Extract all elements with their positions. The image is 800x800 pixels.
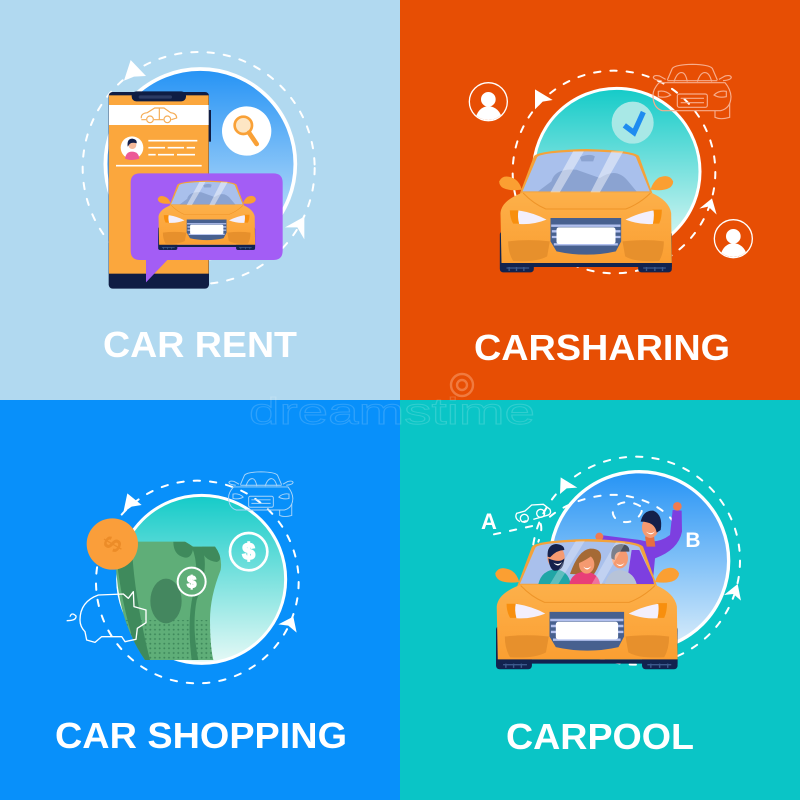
arrowhead top: [123, 493, 142, 512]
dollar ring large: [230, 533, 267, 570]
piggy bank outline: [67, 592, 146, 642]
gradient circle: [533, 88, 700, 255]
dollar ring small: $: [187, 573, 197, 592]
car front: [499, 149, 673, 272]
arrowhead bottom: [285, 217, 304, 239]
illustration: shared car: [469, 64, 752, 273]
coin: [87, 518, 138, 570]
car outline: [653, 64, 731, 119]
car front: [158, 181, 256, 250]
gradient circle: [118, 495, 286, 663]
dashed circular arrow path: [83, 52, 315, 284]
watermark wordmark: dreamstime: [249, 391, 535, 432]
dollar ring small: [178, 568, 206, 596]
avatar: [121, 136, 143, 160]
illustration: money: [67, 472, 299, 683]
letter A: A: [481, 509, 497, 534]
car front: [495, 539, 679, 669]
speech bubble: [131, 173, 283, 282]
dashed route from A to B: [494, 495, 673, 542]
dashed circular arrow path: [96, 481, 299, 683]
gradient circle: [105, 69, 295, 259]
panel: carsharing: [400, 0, 800, 400]
panel: car shopping: [0, 400, 400, 800]
car line icon: [141, 108, 177, 120]
panel background: [0, 0, 400, 400]
smiling man: [605, 544, 637, 584]
panel background: [400, 0, 800, 400]
coin: $: [98, 532, 129, 557]
panel: carpool: [400, 400, 800, 800]
magnifier icon: [222, 106, 271, 156]
purple torso inside car: [627, 550, 654, 584]
watermark spiral: [451, 374, 473, 396]
panel background: [400, 400, 800, 800]
smartphone: [109, 91, 211, 289]
illustration: phone and car rental: [83, 52, 315, 289]
letter B: B: [685, 529, 701, 552]
waving passenger: [595, 502, 682, 583]
user icon left: [469, 83, 507, 122]
dashed circular arrow path: [532, 457, 740, 665]
dollar ring large: $: [242, 539, 255, 565]
user icon right: [714, 220, 752, 259]
arrowhead bottom: [724, 584, 741, 601]
heading: carsharing: CARSHARING: [474, 327, 730, 368]
checkmark badge: [612, 102, 654, 144]
car outline: [229, 472, 293, 517]
heading: car rent: CAR RENT: [103, 324, 297, 365]
profile text lines: [116, 141, 202, 166]
small car outline: [516, 504, 551, 522]
dashed circular arrow path: [513, 71, 715, 273]
panel: car rent: [0, 0, 400, 400]
woman: [569, 549, 601, 584]
passengers in windshield: [538, 541, 654, 584]
windshield glare: [550, 541, 627, 584]
heading: carpool: CARPOOL: [506, 716, 694, 757]
gradient circle: [550, 472, 729, 650]
arrowhead top: [560, 477, 577, 494]
arrowhead bottom: [699, 198, 717, 215]
bearded man: [538, 544, 571, 584]
watermark: [249, 374, 535, 432]
arrowhead bottom: [278, 617, 297, 633]
arrowhead top: [124, 60, 146, 81]
arrowhead top: [535, 89, 553, 109]
banknotes: [115, 542, 221, 662]
panel background: [0, 400, 400, 800]
heading: car shopping: CAR SHOPPING: [55, 715, 347, 756]
illustration: friends in car: [494, 457, 741, 665]
